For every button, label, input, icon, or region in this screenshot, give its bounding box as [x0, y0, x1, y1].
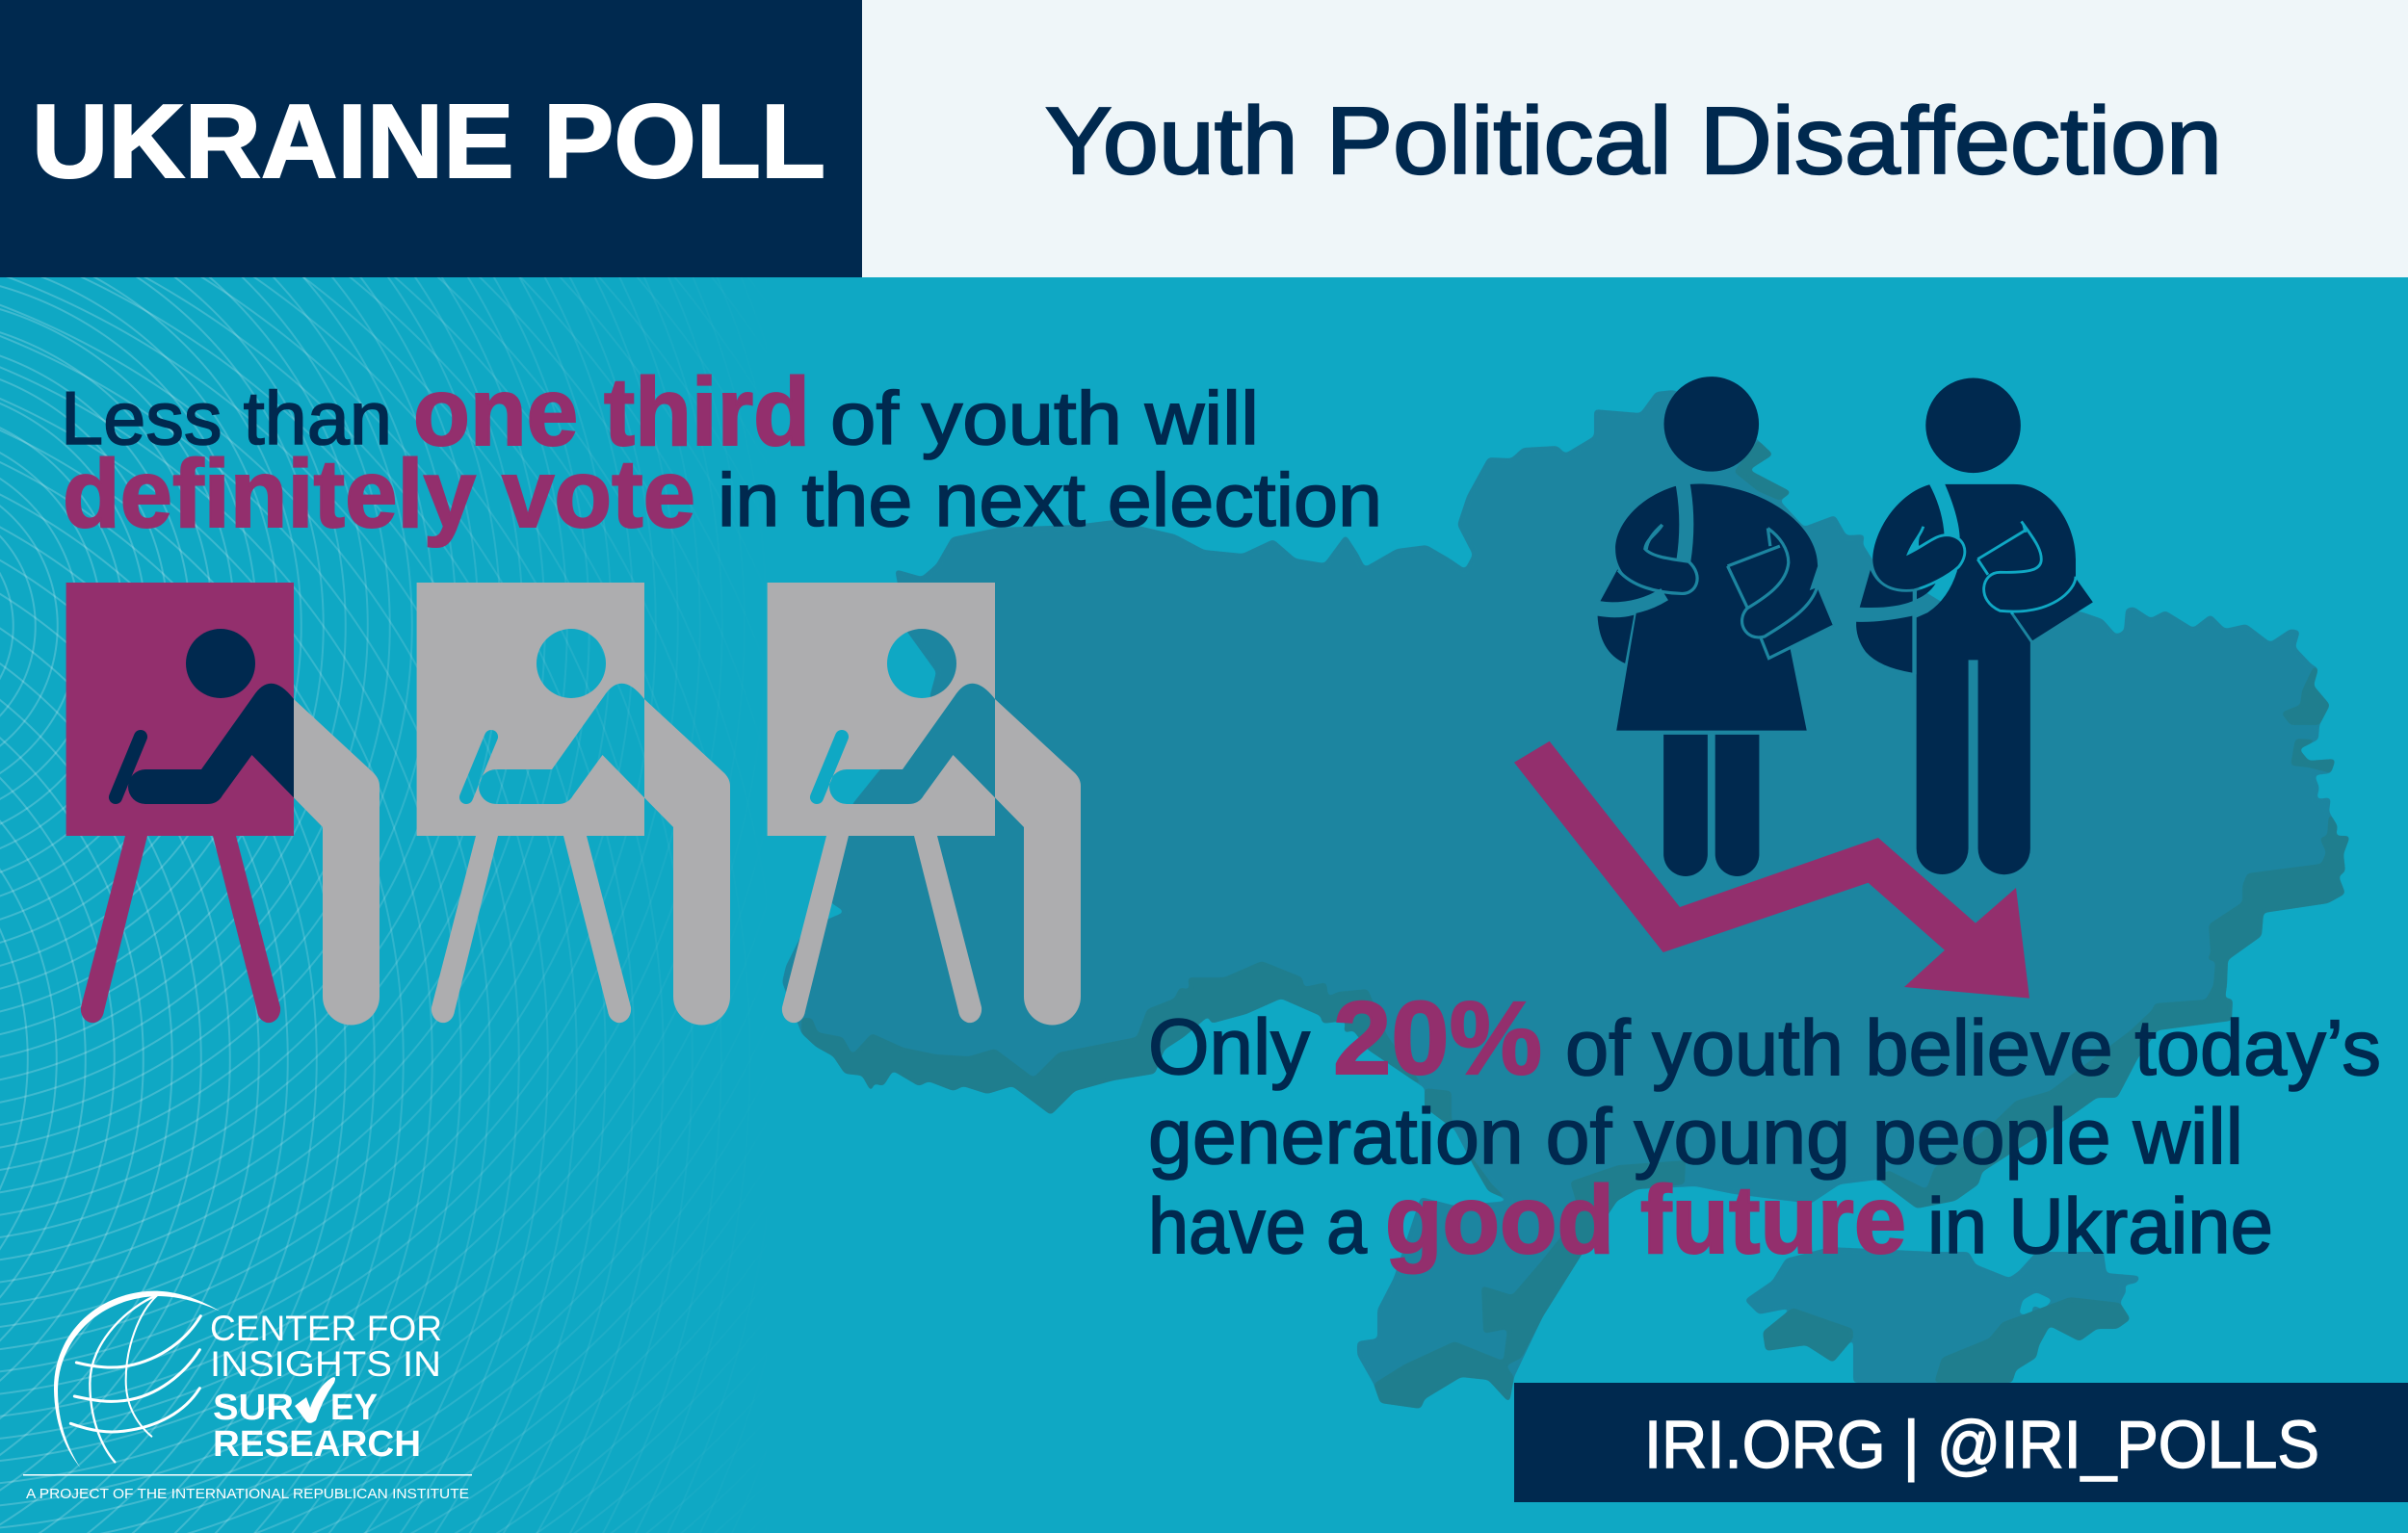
text block: future statistic: [1148, 979, 2381, 1274]
text block: future statistic: generation of young people will: [1148, 1093, 2243, 1181]
text block: future statistic: in Ukraine: [1927, 1182, 2273, 1270]
headline: voting statistic: one third: [413, 358, 810, 466]
headline: voting statistic: Less than: [61, 376, 392, 460]
headline: voting statistic: in the next election: [718, 457, 1382, 542]
icon: students with backpacks: [1597, 377, 2093, 876]
headline: voting statistic: of youth will: [830, 376, 1259, 460]
arrow: downward trend: [1514, 741, 2029, 999]
footer bar: web and social handle: [1514, 1383, 2408, 1502]
logo text: CENTER FOR: [210, 1309, 442, 1348]
map of Ukraine: [782, 390, 2350, 1409]
logo icon: globe: [54, 1291, 220, 1468]
icon: female student: [1597, 377, 1834, 876]
text block: future statistic: have a: [1148, 1182, 1367, 1270]
logo text: INSIGHTS IN: [210, 1344, 441, 1384]
text block: future statistic: Only: [1148, 1003, 1310, 1091]
text block: future statistic: of youth believe today’s: [1565, 1004, 2381, 1092]
header panel: navy title block: [0, 0, 862, 277]
logo text: A PROJECT OF THE INTERNATIONAL REPUBLICAN INSTITUTE: [26, 1486, 469, 1502]
logo: Center for Insights in Survey Research: [23, 1291, 472, 1502]
headline: voting statistic: [61, 358, 1382, 548]
map: Crimea: [1744, 1247, 2140, 1383]
text block: future statistic: good future: [1385, 1166, 1906, 1274]
subtitle: Youth Political Disaffection: [1045, 88, 2222, 194]
logo text: [23, 1309, 472, 1502]
header panel: subtitle block: [862, 0, 2408, 277]
icon: male student: [1856, 377, 2093, 874]
map: darker coastal bands: [801, 440, 2350, 1409]
logo text: RESEARCH: [213, 1424, 421, 1465]
headline: voting statistic: definitely vote: [63, 440, 695, 548]
icon: voter at booth, highlighted: [66, 583, 380, 1025]
title: UKRAINE POLL: [32, 83, 825, 200]
text block: future statistic: 20%: [1333, 979, 1542, 1096]
icon: voter at booth, grey: [417, 583, 730, 1025]
footer text: IRI.ORG | @IRI_POLLS: [1644, 1407, 2319, 1482]
logo text: EY: [330, 1388, 378, 1428]
icon: voter at booth, grey: [768, 583, 1081, 1025]
logo text: SUR: [213, 1388, 294, 1428]
